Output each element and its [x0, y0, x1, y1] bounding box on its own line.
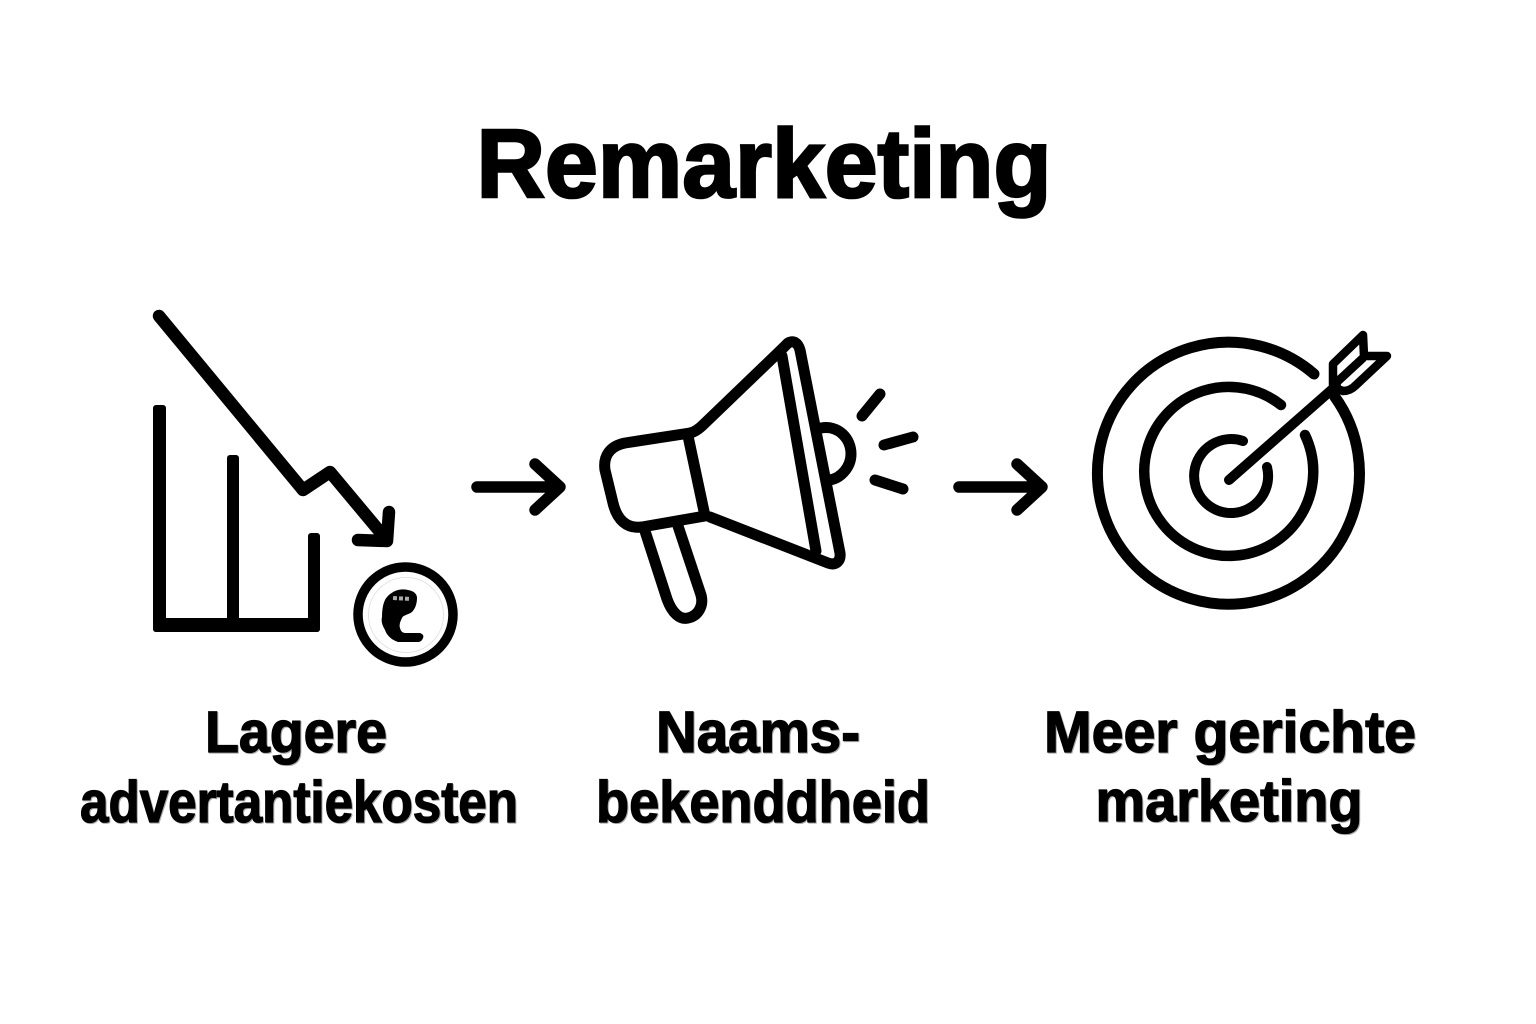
megaphone mouth piece [605, 433, 705, 527]
arrow 2 [959, 464, 1042, 510]
megaphone inner band [782, 356, 816, 551]
label: brand awareness: Naams- [656, 700, 860, 765]
label: lower ad costs: Lagere [205, 700, 387, 765]
icon: falling bar chart with euro coin [153, 316, 453, 662]
falling arrow [159, 316, 389, 541]
icon: target with arrow [1097, 335, 1387, 604]
label: more targeted marketing: Meer gerichte [1044, 700, 1416, 765]
bars [153, 405, 320, 632]
target rings [1097, 342, 1359, 604]
megaphone back bump [821, 428, 851, 480]
label: brand awareness [596, 700, 930, 835]
arrow 1 [477, 464, 560, 510]
arrow fletching [1333, 335, 1387, 391]
title: Remarketing [476, 109, 1052, 218]
megaphone handle [645, 526, 702, 618]
euro coin [358, 567, 453, 662]
sound lines [862, 394, 913, 489]
icon: megaphone [605, 342, 913, 618]
label: more targeted marketing [1044, 700, 1416, 834]
megaphone cone [690, 342, 840, 564]
label: more targeted marketing: marketing [1096, 769, 1362, 834]
label: brand awareness: bekenddheid [596, 770, 930, 835]
label: lower ad costs [80, 700, 518, 835]
arrow shaft [1229, 386, 1336, 480]
label: lower ad costs: advertantiekosten [80, 770, 518, 835]
